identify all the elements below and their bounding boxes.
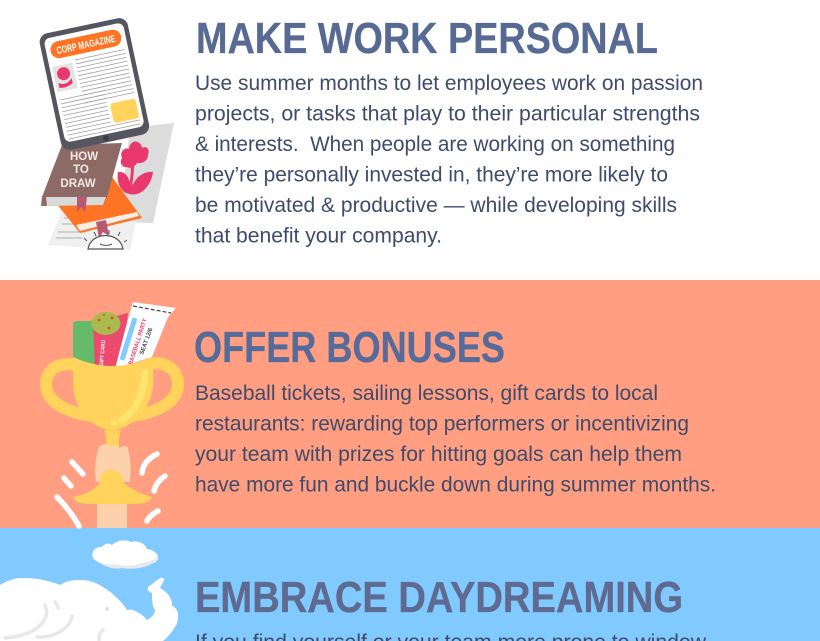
brown book — [41, 143, 122, 206]
trophy stem — [104, 430, 121, 478]
arm — [97, 500, 127, 528]
icon: magazine tablet books and drawings — [38, 16, 174, 250]
motion lines — [57, 454, 165, 526]
green gift card — [73, 321, 97, 371]
baseball ticket — [115, 302, 176, 369]
white sketch sheet — [48, 208, 136, 250]
heading: embrace daydreaming: EMBRACE DAYDREAMING — [195, 574, 683, 622]
text block: make work personal: they’re personally invested in, they’re more likely to — [195, 162, 668, 186]
grey paper — [119, 123, 174, 223]
icon: trophy with tickets and gift cards: GIFT CARD — [99, 340, 107, 366]
tablet — [38, 16, 151, 152]
text block: make work personal: be motivated & productive — while developing skills — [195, 193, 677, 217]
tablet: CORP MAGAZINE — [56, 34, 117, 57]
trophy handles — [46, 364, 92, 416]
orange book — [56, 174, 142, 233]
icon: trophy with tickets and gift cards — [46, 302, 178, 528]
red gift card — [93, 313, 128, 369]
heading: make work personal: MAKE WORK PERSONAL — [196, 15, 658, 63]
text block: make work personal — [195, 71, 703, 248]
panel: make work personal — [38, 15, 703, 250]
text block: offer bonuses: restaurants: rewarding top performers or incentivizing — [195, 412, 689, 436]
sun doodle — [88, 236, 123, 249]
trophy base — [73, 470, 152, 504]
hand — [95, 444, 131, 482]
text block: offer bonuses: have more fun and buckle down during summer months. — [195, 472, 716, 496]
text block: make work personal: projects, or tasks that play to their particular strengths — [195, 102, 700, 126]
text block: make work personal: Use summer months to let employees work on passion — [195, 71, 703, 95]
icon: magazine tablet books and drawings: HOW — [70, 151, 98, 163]
icon: trophy with tickets and gift cards: SEAT 12/6 — [139, 327, 155, 356]
icon: magazine tablet books and drawings: TO — [73, 164, 89, 176]
icon: small cloud — [92, 540, 158, 569]
text block: offer bonuses: your team with prizes for hitting goals can help them — [195, 442, 682, 466]
pink flower — [118, 141, 153, 194]
icon: magazine tablet books and drawings: DRAW — [60, 178, 96, 190]
text block: make work personal: & interests. When people are working on something — [195, 132, 675, 156]
round food — [92, 312, 120, 335]
panel: offer bonuses — [46, 302, 716, 528]
text block: offer bonuses: Baseball tickets, sailing lessons, gift cards to local — [195, 381, 658, 405]
trophy cup — [73, 357, 153, 430]
icon: trophy with tickets and gift cards: BASEBALL PARTY — [128, 318, 149, 366]
icon: elephant-shaped cloud — [0, 578, 178, 641]
heading: offer bonuses: OFFER BONUSES — [194, 324, 505, 372]
text block: offer bonuses — [195, 381, 716, 496]
text block: make work personal: that benefit your company. — [195, 224, 442, 248]
panel: embrace daydreaming — [0, 540, 706, 641]
